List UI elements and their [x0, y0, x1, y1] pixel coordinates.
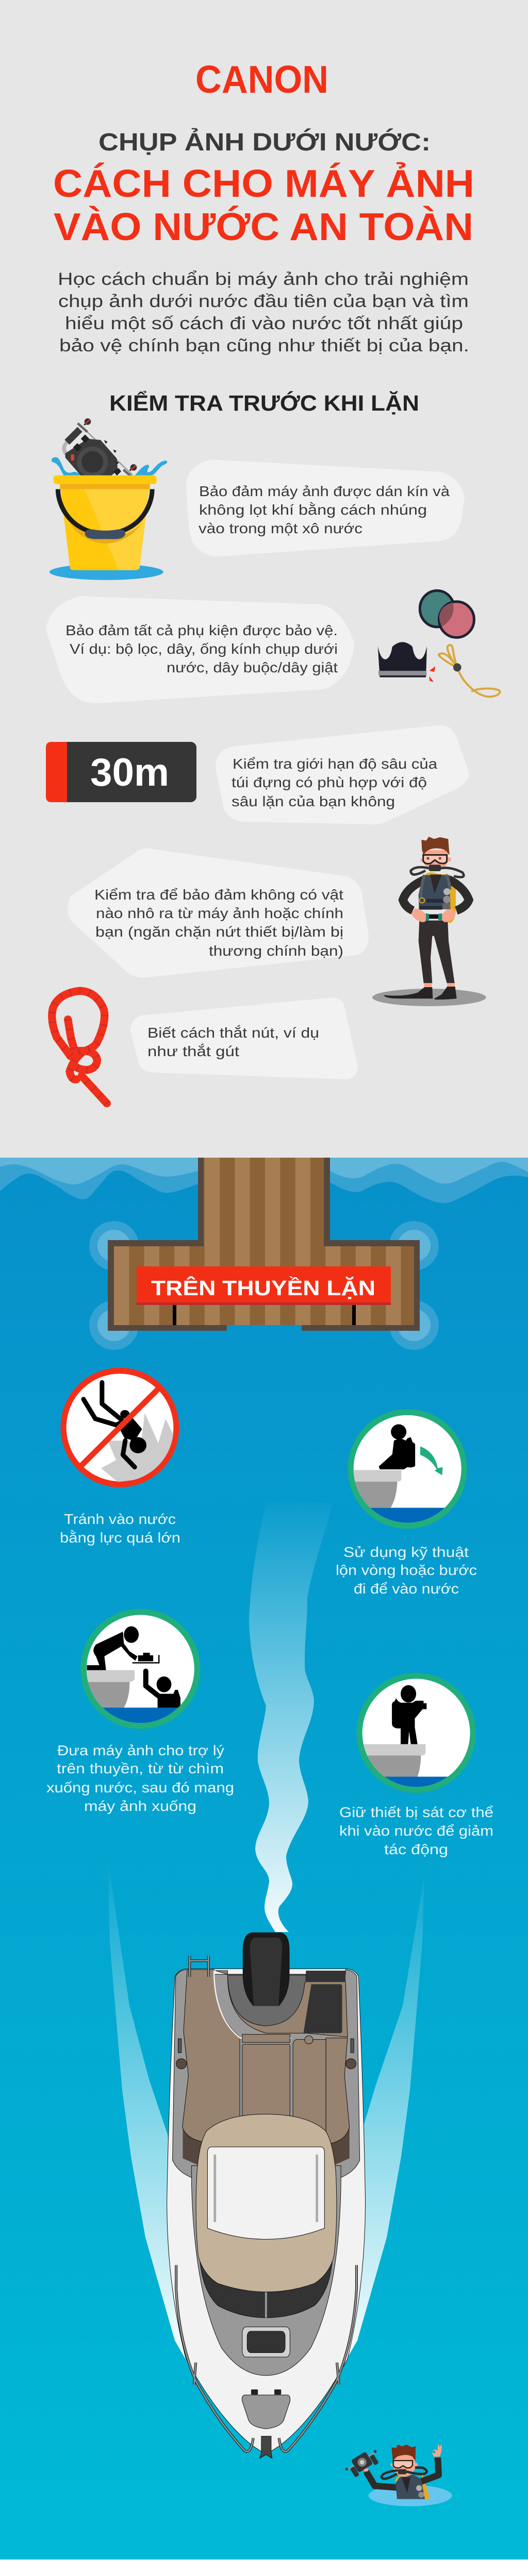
ladder — [190, 1956, 208, 1977]
icon: handing camera — [80, 1609, 202, 1730]
banner: on the dive boat: TRÊN THUYỀN LẶN — [151, 1276, 375, 1300]
waves — [0, 1158, 528, 1203]
panel: bubble protrusions — [68, 848, 369, 978]
banner: on the dive boat — [137, 1266, 391, 1305]
logo: Canon: CANON — [195, 58, 328, 101]
text: avoid forceful entry: bằng lực quá lớn — [60, 1530, 180, 1546]
text: protrusions: nào nhô ra từ máy ảnh hoặc chính — [96, 905, 343, 921]
text: avoid forceful entry: Tránh vào nước — [64, 1511, 176, 1527]
text: hand camera to assistant: trên thuyền, từ từ chìm — [57, 1760, 224, 1776]
cabin skylight — [207, 2147, 324, 2239]
wake stream — [249, 1503, 333, 1932]
badge: 30m depth limit: 30m — [90, 751, 169, 794]
diver with camera in water — [343, 2443, 452, 2506]
text: depth limit: Kiểm tra giới hạn độ sâu của — [233, 756, 437, 772]
icon: yellow bucket — [50, 476, 163, 580]
text: hand camera to assistant: Đưa máy ảnh cho trợ lý — [57, 1742, 224, 1758]
text: seal check: vào trong một xô nước — [199, 520, 362, 536]
icon: camera dunked in bucket — [50, 418, 167, 580]
panel: bubble depth limit — [216, 725, 469, 824]
step 3: hand camera to assistant — [46, 1609, 234, 1814]
text: knots: Biết cách thắt nút, ví dụ — [147, 1025, 319, 1041]
text: hand camera to assistant — [46, 1742, 234, 1814]
text: seal check: Bảo đảm máy ảnh được dán kín và — [199, 483, 450, 499]
icon: lens hood — [378, 642, 435, 682]
floor panels — [242, 2035, 350, 2144]
panel: sea background — [0, 1158, 528, 2560]
title — [53, 128, 474, 248]
text: protrusions: Kiểm tra để bảo đảm không có vật — [94, 887, 343, 903]
heading: pre-dive checks: KIỂM TRA TRƯỚC KHI LẶN — [109, 391, 419, 416]
title: VÀO NƯỚC AN TOÀN — [54, 205, 473, 248]
lower deck edges — [183, 2127, 350, 2166]
icon: red rope knot — [52, 991, 107, 1104]
text: hand camera to assistant: máy ảnh xuống — [84, 1798, 196, 1814]
wooden dock — [108, 1158, 420, 1331]
bow superstructure — [192, 2166, 341, 2376]
title: CÁCH CHO MÁY ẢNH — [53, 162, 474, 205]
text: avoid forceful entry — [60, 1511, 180, 1546]
icon: diver holding camera — [357, 1673, 478, 1794]
icon: back roll entry — [348, 1409, 467, 1531]
rear deck — [183, 1970, 240, 2142]
intro paragraph: Học cách chuẩn bị máy ảnh cho trải nghiệm — [58, 269, 469, 289]
text: roll or step entry: lộn vòng hoặc bước — [336, 1562, 477, 1578]
text: hold gear close — [339, 1804, 493, 1857]
text: accessories: Bảo đảm tất cả phụ kiện được bảo vệ. — [65, 622, 338, 638]
text: knots: như thắt gút — [147, 1043, 239, 1059]
text: hold gear close: Giữ thiết bị sát cơ thể — [339, 1804, 493, 1820]
text: roll or step entry — [336, 1544, 477, 1597]
text: seal check: không lọt khí bằng cách nhúng — [199, 502, 427, 518]
intro paragraph: bảo vệ chính bạn cũng như thiết bị của bạn. — [59, 336, 469, 355]
dark hatches — [303, 1971, 345, 2033]
text: accessories: nước, dây buộc/dây giật — [167, 659, 338, 675]
text: depth limit: sâu lặn của bạn không — [232, 793, 395, 809]
engine well — [227, 1975, 306, 2026]
text: seal check — [199, 483, 450, 536]
text: hold gear close: tác động — [384, 1841, 448, 1857]
boat wake V — [108, 1858, 424, 2370]
title: CHỤP ẢNH DƯỚI NƯỚC: — [98, 128, 431, 156]
panel: bubble seal check — [186, 460, 465, 556]
boat hull — [167, 1969, 366, 2454]
badge: 30m depth limit — [46, 742, 196, 802]
icon: camera housing with splashes — [52, 418, 167, 478]
icon: colour filters — [420, 590, 474, 637]
panel: bubble knots — [130, 997, 358, 1079]
text: hold gear close: khi vào nước để giảm — [339, 1823, 493, 1839]
outboard motor — [243, 1933, 289, 2006]
step 4: hold gear close — [339, 1673, 493, 1857]
text: accessories: Ví dụ: bộ lọc, dây, ống kính chụp dưới — [70, 641, 338, 657]
grab rails — [215, 2155, 317, 2222]
text: roll or step entry: đi để vào nước — [354, 1581, 459, 1597]
side decks — [173, 1970, 360, 2178]
text: accessories — [65, 622, 338, 675]
icon: lanyard strap — [439, 645, 500, 697]
icon: prohibited jump — [61, 1368, 179, 1487]
cleats — [176, 2039, 356, 2069]
intro paragraph: hiểu một số cách đi vào nước tốt nhất giúp — [65, 314, 463, 333]
icon: standing scuba diver — [372, 837, 486, 1006]
text: knots — [147, 1025, 319, 1059]
text: protrusions — [94, 887, 343, 959]
text: hand camera to assistant: xuống nước, sau đó mang — [46, 1780, 234, 1795]
windshield — [200, 2252, 333, 2318]
panel: grey pre-dive background — [0, 0, 528, 1158]
text: protrusions: bạn (ngăn chặn nứt thiết bị/làm bị — [95, 924, 343, 940]
dock ripples — [89, 1221, 439, 1350]
icon: filters, lens hood and strap — [378, 590, 500, 697]
bow rails — [176, 2265, 356, 2451]
step 1: avoid forceful entry — [60, 1368, 180, 1546]
anchor locker — [242, 2389, 290, 2458]
panel: white footer — [0, 2560, 528, 2576]
text: depth limit — [232, 756, 437, 809]
intro paragraph: chụp ảnh dưới nước đầu tiên của bạn và tìm — [58, 292, 469, 311]
text: protrusions: thương chính bạn) — [209, 943, 343, 959]
dive boat top view — [167, 1933, 366, 2458]
intro paragraph — [58, 269, 469, 355]
cabin roof — [196, 2114, 337, 2292]
step 2: roll or step entry — [336, 1409, 477, 1597]
text: depth limit: túi đựng có phù hợp với độ — [232, 774, 427, 790]
text: roll or step entry: Sử dụng kỹ thuật — [343, 1544, 469, 1560]
foredeck hatch — [242, 2327, 290, 2357]
panel: bubble accessories — [46, 596, 354, 703]
